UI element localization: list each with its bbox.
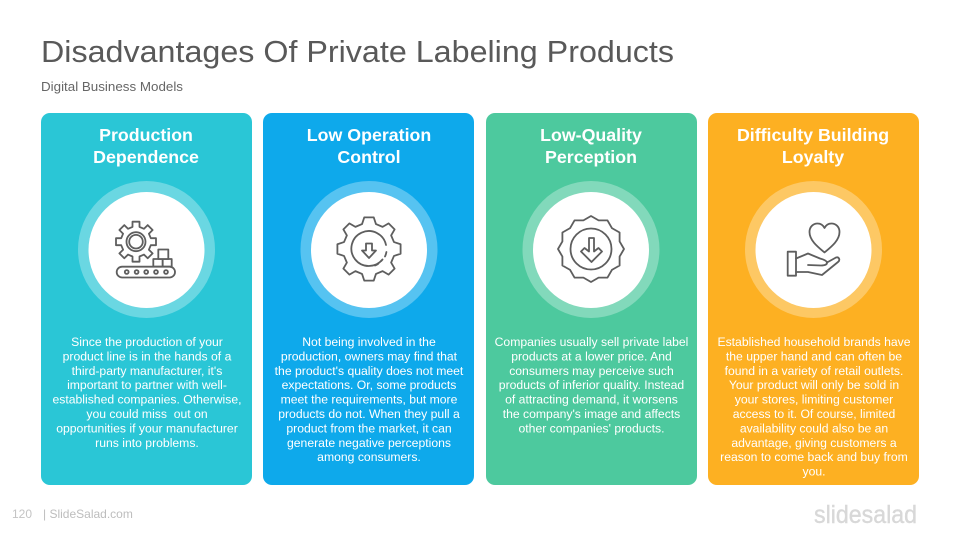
panel: low operation control <box>263 113 474 485</box>
panel text: Companies usually sell private label <box>495 335 688 349</box>
panel text: products at a lower price. And <box>511 349 672 363</box>
panel text: other companies' products. <box>519 421 664 435</box>
panel text: Not being involved in the <box>302 335 436 349</box>
panel text: access to it. Of course, limited <box>733 407 895 421</box>
panel text: the product's quality does not meet <box>275 364 464 378</box>
icon ring <box>300 181 438 318</box>
panel text <box>52 335 242 450</box>
panel heading: Difficulty Building <box>737 125 889 145</box>
panel background <box>486 113 697 485</box>
panel background <box>41 113 252 485</box>
panel heading <box>307 125 431 167</box>
panel text: Since the production of your <box>71 335 223 349</box>
panel heading: Dependence <box>93 147 199 167</box>
panel text <box>717 335 911 479</box>
subtitle: Digital Business Models <box>41 79 184 94</box>
logo wordmark: slidesalad <box>814 501 917 529</box>
panel text: products do not. When they pull a <box>278 407 460 421</box>
panel heading <box>737 125 889 167</box>
panel text: of attracting demand, it worsens <box>505 393 678 407</box>
panel text: product line is in the hands of a <box>63 349 232 363</box>
panel text: expectations. Or, some products <box>282 378 456 392</box>
panel heading: Low-Quality <box>540 125 642 145</box>
panel text: among consumers. <box>317 450 421 464</box>
icon ring <box>745 181 882 318</box>
panel heading <box>93 125 199 167</box>
icon: gear and conveyor <box>116 222 175 278</box>
panel text: established companies. Otherwise, <box>52 393 242 407</box>
panel: difficulty building loyalty <box>708 113 919 485</box>
panel heading: Control <box>337 147 401 167</box>
panel text: consumers may perceive such <box>509 364 674 378</box>
panel text <box>495 335 688 435</box>
panel text: production, owners may find that <box>281 349 458 363</box>
footer source: | SlideSalad.com <box>43 507 133 521</box>
panel text: advantage, giving customers a <box>731 436 897 450</box>
icon: badge with down arrow <box>558 216 624 282</box>
panel text: found in a variety of retail outlets. <box>725 364 903 378</box>
title: Disadvantages Of Private Labeling Products <box>41 34 674 69</box>
panel text: meet the requirements, but more <box>281 393 458 407</box>
panel text: reason to come back and buy from <box>720 450 908 464</box>
panel text: third-party manufacturer, it's <box>72 364 222 378</box>
icon ring <box>522 181 660 318</box>
panel background <box>263 113 474 485</box>
panel background <box>708 113 919 485</box>
icon: hand holding heart <box>788 224 840 276</box>
panel text: Your product will only be sold in <box>729 378 899 392</box>
panel text: you. <box>802 465 826 479</box>
icon: gear with down arrow <box>337 217 401 281</box>
panel text: generate negative perceptions <box>287 436 451 450</box>
panel text: runs into problems. <box>95 436 199 450</box>
panel heading <box>540 125 642 167</box>
panel: production dependence <box>41 113 252 485</box>
panel text <box>275 335 464 464</box>
panel text: your stores, limiting customer <box>735 393 893 407</box>
panel text: the upper hand and can often be <box>726 349 902 363</box>
panel text: important to partner with well- <box>67 378 227 392</box>
icon ring <box>78 181 215 318</box>
panel text: product from the market, it can <box>286 421 452 435</box>
panel text: you could miss out on <box>86 407 208 421</box>
panel text: Established household brands have <box>717 335 911 349</box>
panel heading: Perception <box>545 147 637 167</box>
panel text: products of inferior quality. Instead <box>499 378 684 392</box>
panel: low-quality perception <box>486 113 697 485</box>
panel heading: Loyalty <box>782 147 844 167</box>
panel text: the company's image and affects <box>503 407 680 421</box>
panel heading: Low Operation <box>307 125 431 145</box>
panel text: opportunities if your manufacturer <box>56 421 238 435</box>
page number: 120 <box>12 507 32 521</box>
panel heading: Production <box>99 125 193 145</box>
panel text: availability could also be an <box>740 421 888 435</box>
